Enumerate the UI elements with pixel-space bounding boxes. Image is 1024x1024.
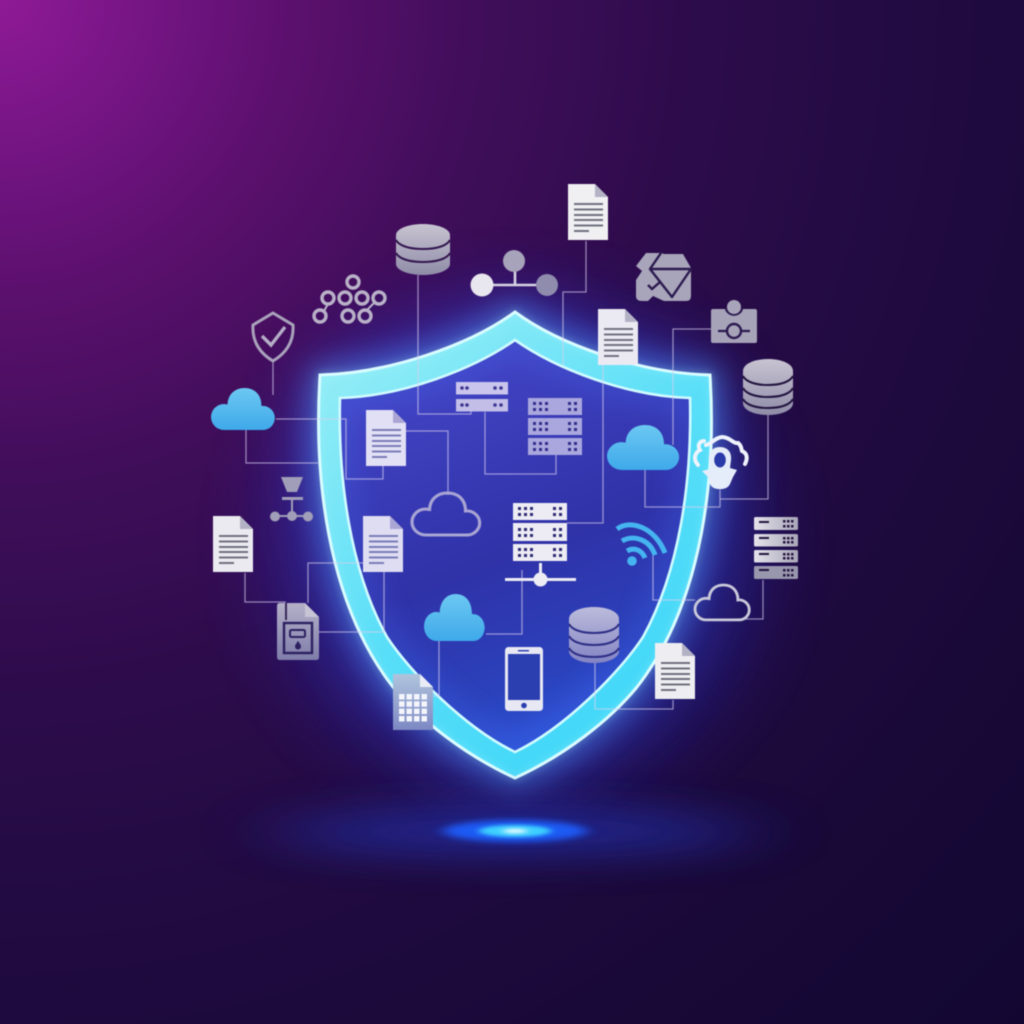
icon: diamond check badge <box>636 253 691 301</box>
icon: white server with network bus <box>505 503 576 586</box>
icon: server stack far right <box>754 517 798 579</box>
icon: server pair <box>456 382 508 412</box>
icon: smartphone <box>505 647 543 711</box>
icon: document on shield edge <box>598 309 638 365</box>
blue halo behind shield <box>195 225 835 865</box>
shield <box>319 312 711 778</box>
icon: network funnel <box>270 477 313 522</box>
icon: document far left <box>213 516 253 572</box>
icon: outline cloud center <box>412 493 480 535</box>
icon: document inside shield upper <box>366 410 406 466</box>
icon: outline cloud right <box>695 585 749 620</box>
icon: document top <box>568 184 608 240</box>
icon: database right <box>743 359 793 415</box>
icon: document bottom right <box>655 643 695 699</box>
icon: shield check <box>253 313 293 361</box>
icon: cloud left <box>211 388 275 430</box>
icon: node cluster <box>314 276 385 322</box>
icon: database bottom <box>569 607 619 663</box>
icon: server stack lavender <box>528 398 582 455</box>
main illustration <box>210 183 799 878</box>
icon: spreadsheet document <box>393 674 433 730</box>
connector lines <box>245 241 768 709</box>
shield inner panel <box>330 330 700 760</box>
icon: gear with keyhole <box>695 437 747 489</box>
shield band <box>319 312 711 778</box>
floor glow <box>275 810 755 854</box>
icon: floppy disk <box>277 603 319 660</box>
icon: wifi <box>617 525 665 566</box>
icon: database top <box>396 224 450 275</box>
icon: cloud center <box>424 594 485 641</box>
icon: three node network <box>470 250 558 296</box>
icon: document inside shield left <box>363 516 403 572</box>
icon: badge with node <box>711 300 757 343</box>
icon: cloud right <box>607 425 679 470</box>
